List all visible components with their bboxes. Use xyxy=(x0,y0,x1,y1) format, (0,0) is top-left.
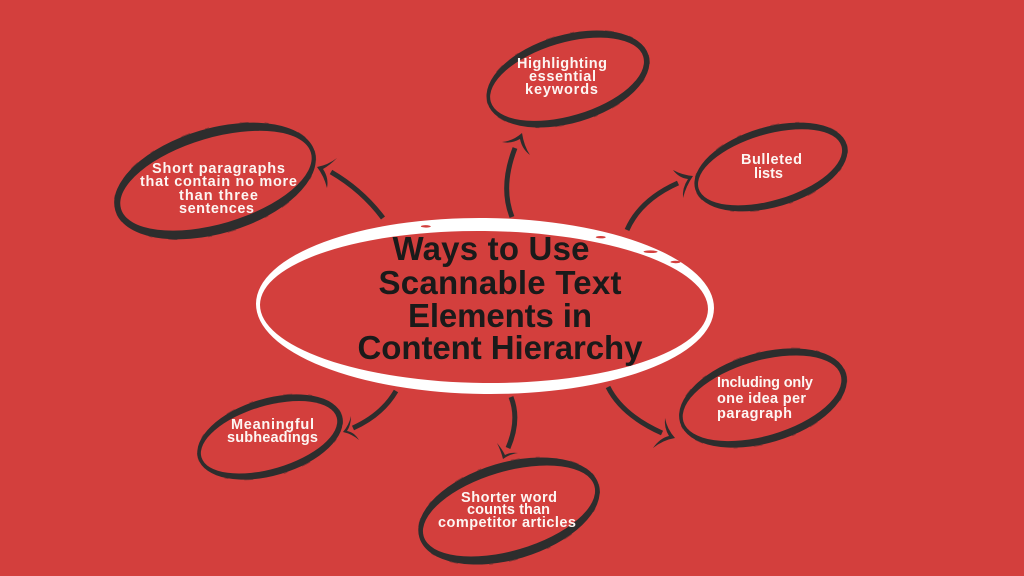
central white ellipse xyxy=(255,216,715,396)
label: that contain no more xyxy=(140,174,297,190)
label: lists xyxy=(754,166,783,182)
label: subheadings xyxy=(227,430,318,446)
ring xyxy=(667,330,859,466)
label: competitor articles xyxy=(438,515,576,531)
label: Highlighting xyxy=(517,56,607,72)
panel: meaningful subheadings xyxy=(187,378,353,496)
label xyxy=(741,152,802,182)
label: Including only xyxy=(717,375,813,391)
arrow: to one idea per paragraph xyxy=(608,387,675,448)
label: keywords xyxy=(525,82,598,98)
title xyxy=(358,230,643,366)
ring xyxy=(100,101,330,261)
label: sentences xyxy=(179,201,254,217)
label: than three xyxy=(179,188,258,204)
panel: one idea per paragraph xyxy=(667,330,859,466)
panel: bulleted lists xyxy=(684,106,858,228)
arrow: to meaningful subheadings xyxy=(343,391,396,440)
label xyxy=(717,375,813,422)
title: Elements in xyxy=(408,297,592,334)
label xyxy=(517,56,607,98)
label: Shorter word xyxy=(461,490,557,506)
arrow: to highlighting keywords xyxy=(502,133,530,217)
title: Ways to Use xyxy=(392,230,590,267)
panel: shorter word counts xyxy=(405,437,613,576)
ring xyxy=(475,12,661,146)
label: one idea per xyxy=(717,391,806,407)
label xyxy=(140,161,297,217)
label: essential xyxy=(529,69,596,85)
label xyxy=(438,490,576,531)
label: paragraph xyxy=(717,406,792,422)
arrow: to shorter word counts xyxy=(497,397,518,459)
arrow: to short paragraphs xyxy=(317,158,383,218)
label xyxy=(227,417,318,446)
ring xyxy=(187,378,353,496)
ring xyxy=(405,437,613,576)
ring xyxy=(684,106,858,228)
label: Short paragraphs xyxy=(152,161,285,177)
label: Bulleted xyxy=(741,152,802,168)
label: Meaningful xyxy=(231,417,314,433)
title: Content Hierarchy xyxy=(358,329,643,366)
arrow: to bulleted lists xyxy=(627,170,693,230)
label: counts than xyxy=(467,502,550,518)
panel: highlighting keywords xyxy=(475,12,661,146)
title: Scannable Text xyxy=(378,264,622,301)
panel: short paragraphs xyxy=(100,101,330,261)
